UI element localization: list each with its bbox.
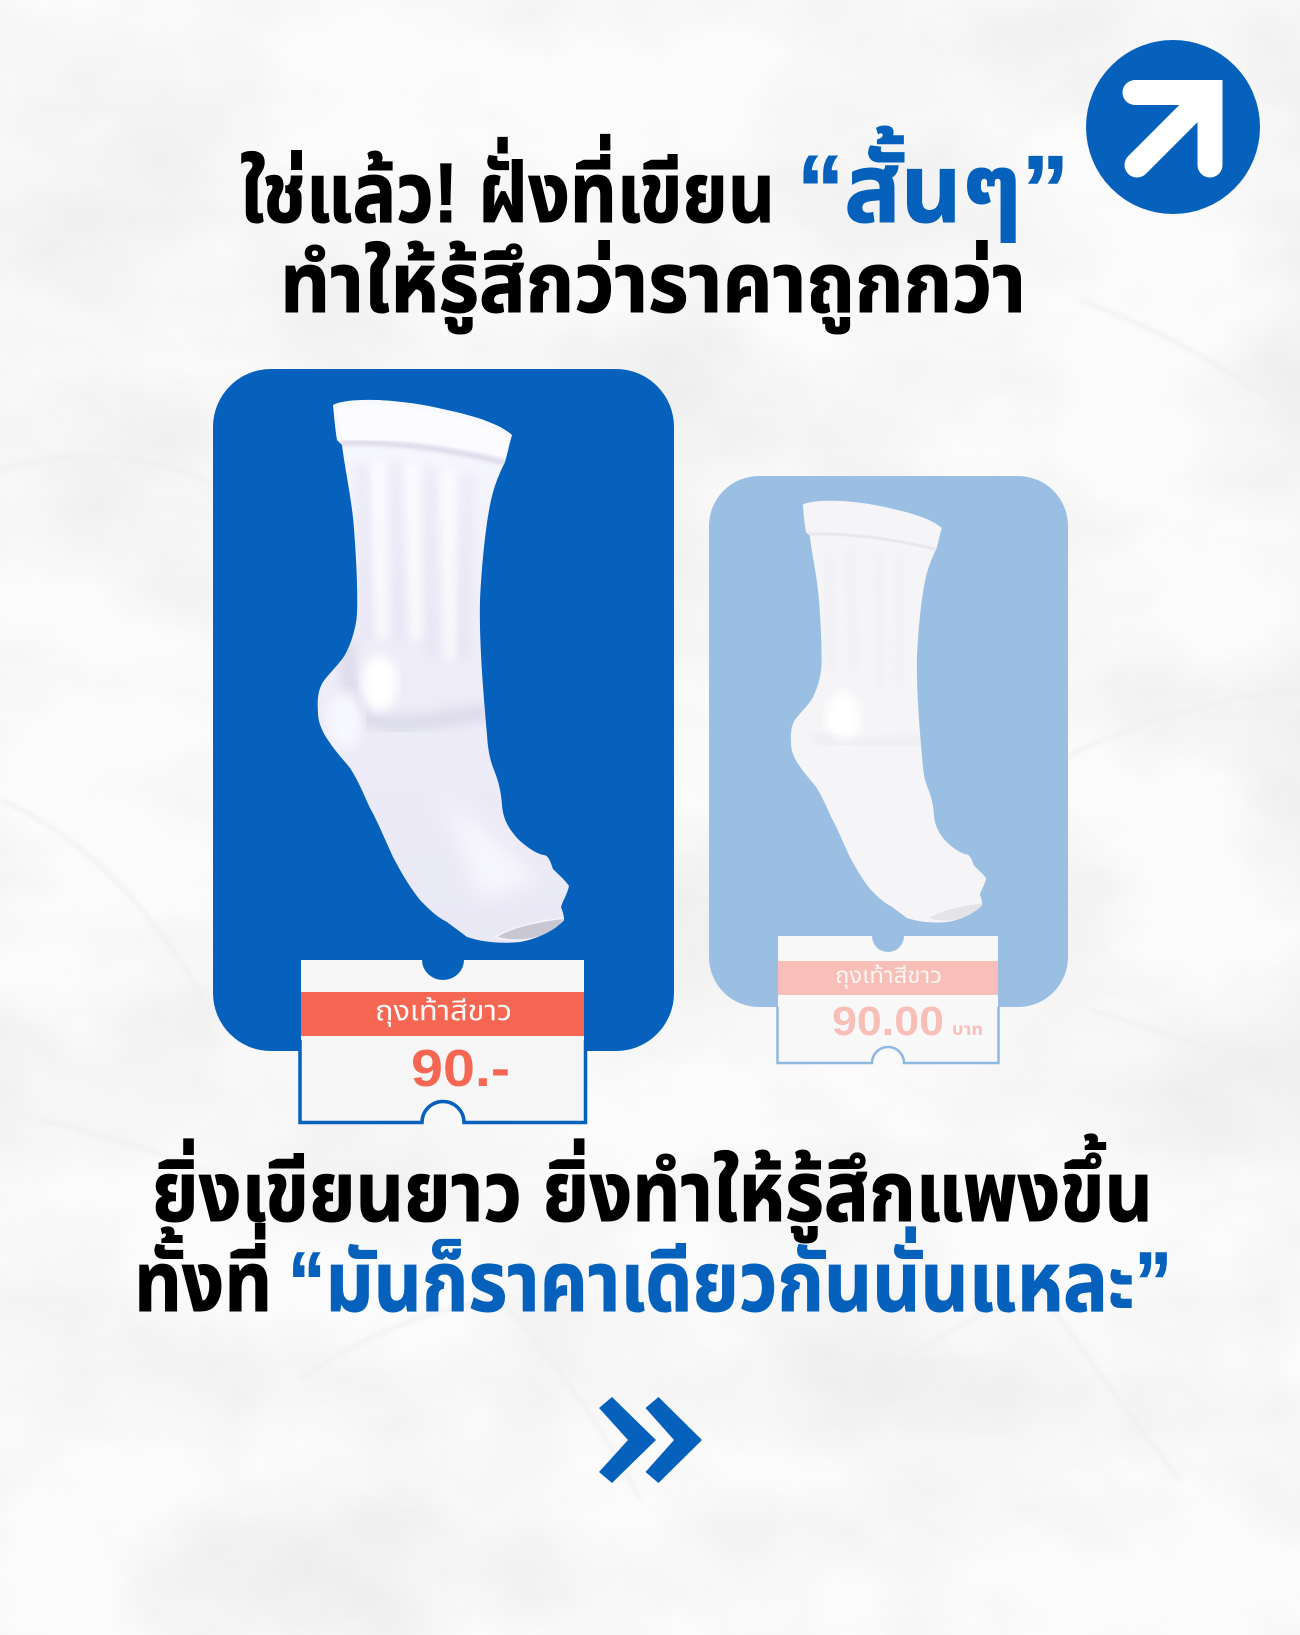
title: [240, 125, 1069, 334]
sock photo: [791, 501, 986, 923]
tag price: 90.-: [411, 1040, 510, 1098]
panel background: [709, 476, 1068, 1007]
tag price: 90.00: [832, 998, 944, 1044]
message line 2 black: ทั้งที่: [134, 1223, 272, 1329]
tag band: [301, 992, 584, 1036]
bottom message: [134, 1133, 1172, 1329]
panel background: [213, 369, 674, 1051]
tag label: ถุงเท้าสีขาว: [375, 995, 512, 1027]
icon: up-right arrow badge: [1086, 40, 1260, 214]
panel: short price: [213, 369, 674, 1122]
heading line 2: ทำให้รู้สึกว่าราคาถูกกว่า: [280, 236, 1026, 334]
price tag: [300, 960, 586, 1122]
price tag: [778, 936, 998, 1063]
tag label: ถุงเท้าสีขาว: [835, 963, 942, 989]
heading line 1 black: ใช่แล้ว! ฝั่งที่เขียน: [240, 134, 775, 240]
tag currency: บาท: [952, 1020, 983, 1039]
message line 2 highlight: “มันก็ราคาเดียวกันนั่นแหละ”: [288, 1226, 1172, 1329]
heading highlight: “สั้นๆ”: [797, 125, 1069, 243]
message line 1: ยิ่งเขียนยาว ยิ่งทำให้รู้สึกแพงขึ้น: [152, 1133, 1153, 1243]
icon: double chevron arrow: [599, 1397, 702, 1483]
panel: long price: [709, 476, 1068, 1063]
tag band: [778, 961, 998, 995]
sock photo: [318, 400, 569, 943]
